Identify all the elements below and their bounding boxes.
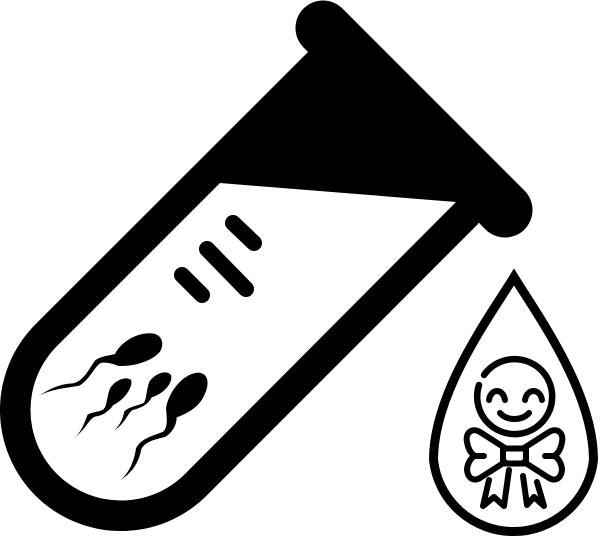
sperm 1 — [39, 333, 162, 396]
sperm 2 — [75, 378, 131, 437]
bow right ribbon tail — [523, 476, 544, 506]
graduation mark: long middle — [207, 249, 246, 289]
sperm 4 — [121, 373, 208, 480]
right eye — [525, 391, 542, 400]
tube outer body — [0, 35, 490, 531]
droplet with baby — [434, 277, 594, 532]
smile — [500, 413, 529, 419]
bow knot — [503, 448, 526, 464]
left eye — [489, 391, 505, 400]
droplet outline — [434, 277, 594, 532]
bow left ribbon tail — [483, 470, 509, 506]
test tube — [0, 28, 505, 531]
baby head — [477, 359, 552, 434]
sperm group — [39, 333, 208, 480]
graduation mark: short lower — [182, 275, 202, 295]
sperm 3 — [114, 372, 171, 431]
tube rim — [323, 28, 505, 210]
bow right loop — [524, 430, 562, 480]
bow left loop — [467, 430, 505, 480]
graduation mark: short upper — [233, 223, 254, 243]
tube liquid interior — [30, 183, 456, 501]
